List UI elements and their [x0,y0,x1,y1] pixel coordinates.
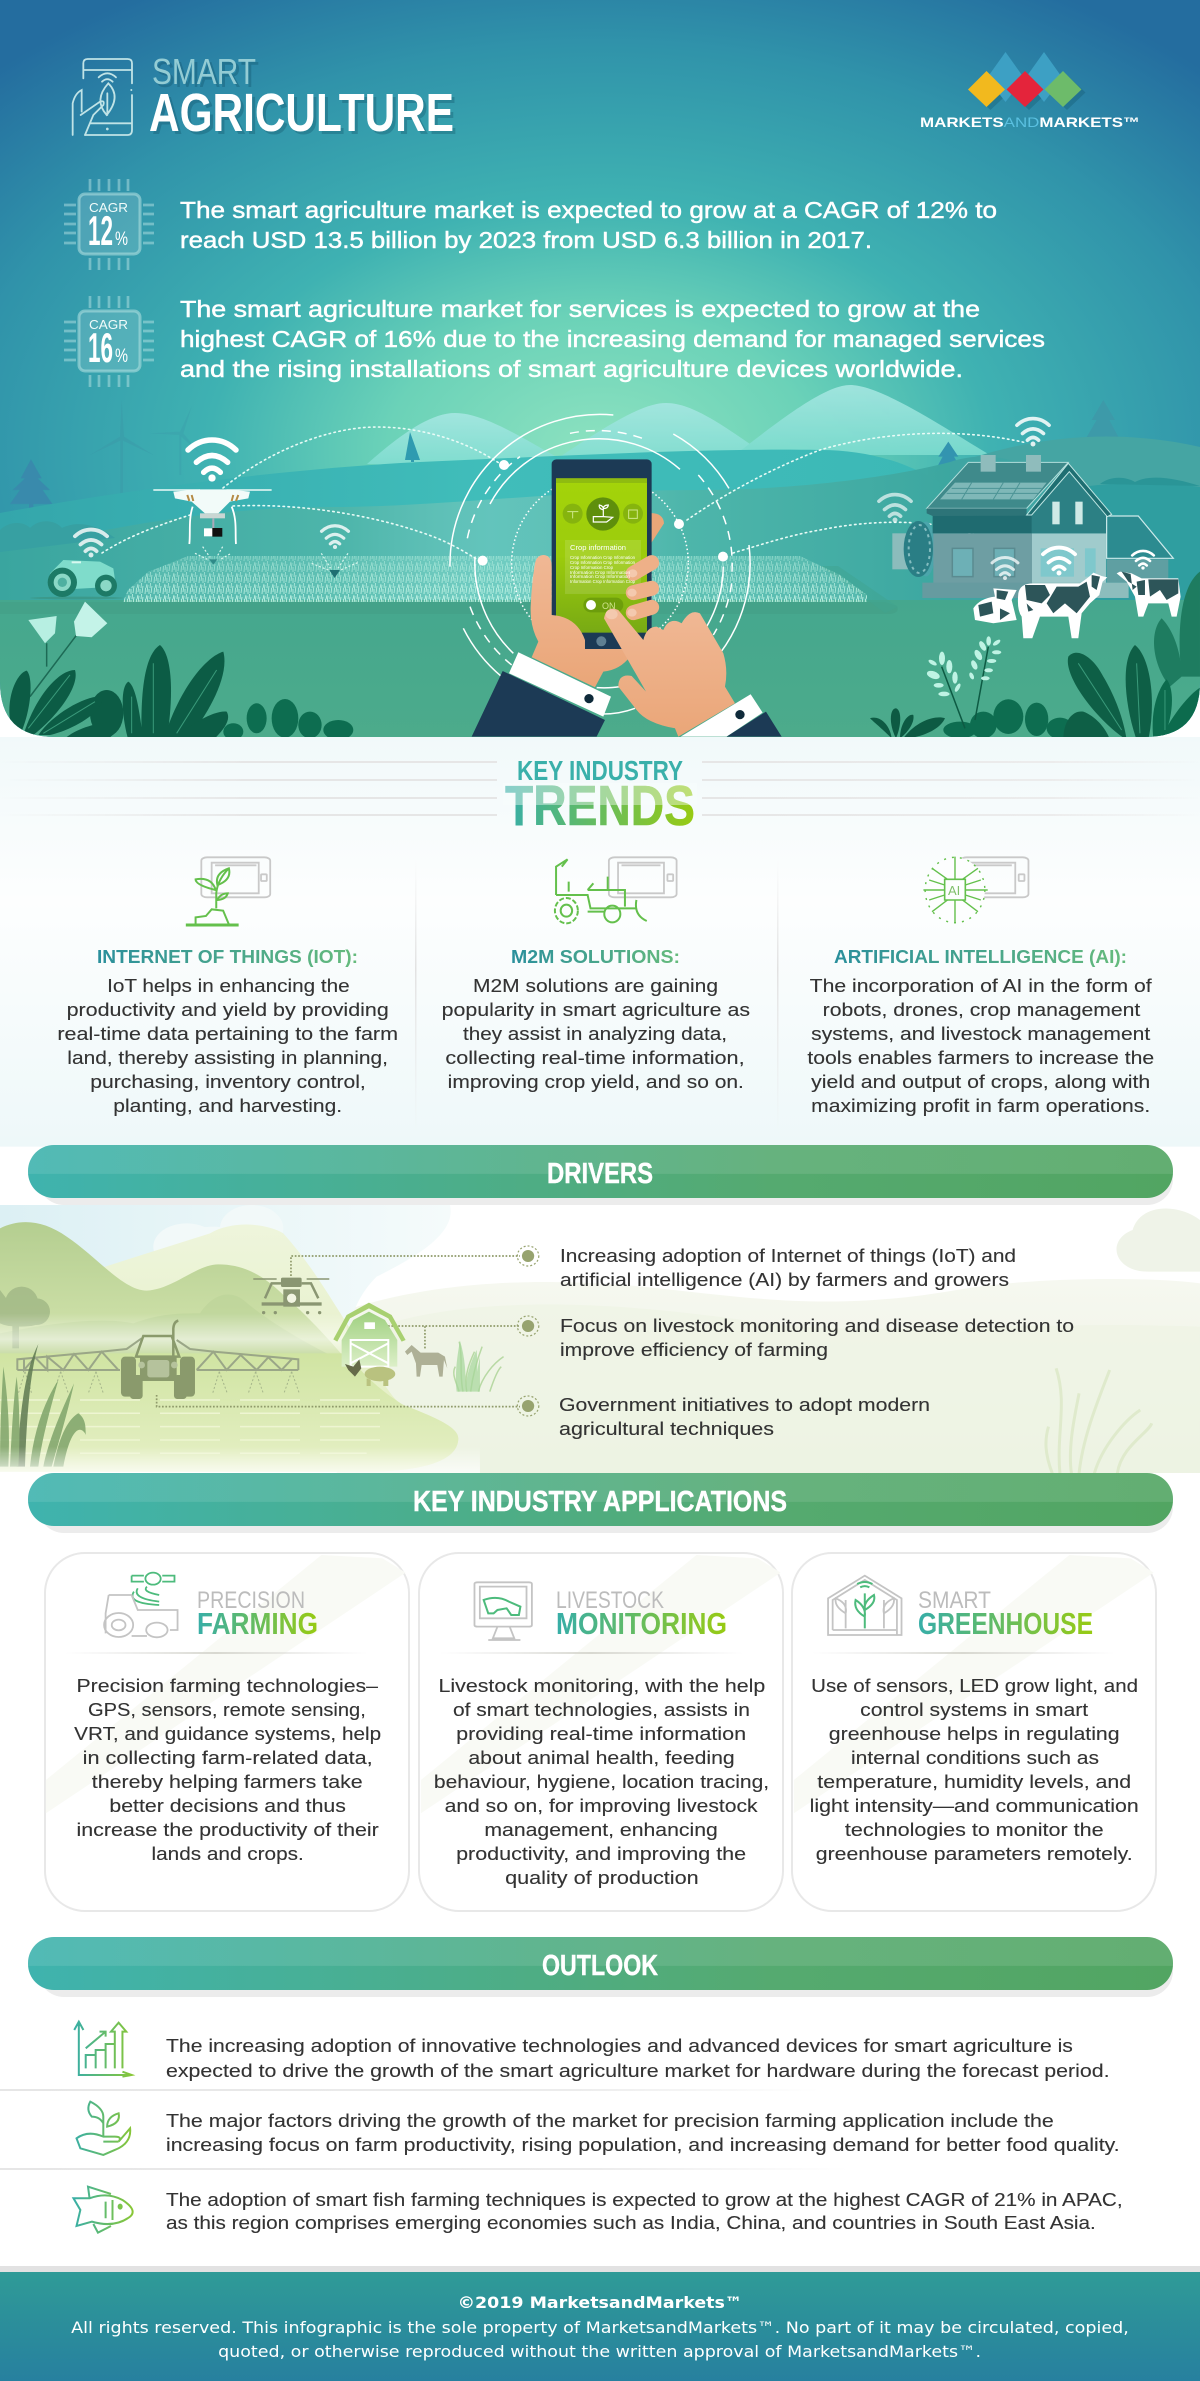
card body: increase the productivity of their [76,1819,379,1840]
card body: behaviour, hygiene, location tracing, [434,1771,769,1792]
right hills [337,1279,1200,1473]
right foliage [870,572,1200,740]
phone screen text: Crop Information Crop Information [570,560,635,565]
trend: internet of things: planting, and harvesting. [113,1095,342,1116]
banner: key industry applications: KEY INDUSTRY APPLICATIONS [413,1486,787,1518]
distant windmills and trees, left [10,435,181,508]
card body: better decisions and thus [109,1795,346,1816]
outlook text: fish farming [166,2189,1123,2233]
icon: monitor with cow [474,1582,532,1640]
icon: growth chart [74,2022,132,2077]
sprayer tractor [17,1321,299,1399]
drivers list: artificial intelligence (AI) by farmers and growers [560,1269,1009,1290]
trend: artificial intelligence: tools enables farmers to increase the [807,1047,1154,1068]
stat text: services CAGR: highest CAGR of 16% due to the increasing demand for managed services [180,326,1045,352]
card body: quality of production [505,1867,699,1888]
card body: light intensity—and communication [810,1795,1139,1816]
trend: artificial intelligence: maximizing profit in farm operations. [811,1095,1150,1116]
rolling hills [0,436,1200,600]
card body: thereby helping farmers take [92,1771,363,1792]
outlook icons [73,2022,133,2233]
icon: CAGR 16% chip: % [115,346,128,367]
card body: and so on, for improving livestock [445,1795,758,1816]
left hand [531,555,630,687]
card body: of smart technologies, assists in [453,1699,750,1720]
icon: CAGR 12% chip [64,179,154,270]
trend: internet of things: land, thereby assisting in planning, [67,1047,388,1068]
icon: CAGR 16% chip [64,296,154,387]
footer: All rights reserved. This infographic is the sole property of MarketsandMarkets™. No part of it may be circulated, copied, [71,2318,1129,2337]
card heading: PRECISION [197,1587,305,1614]
icon: AI chip with tablet [923,857,1028,923]
phone screen text: Information Crop Information [570,574,630,579]
drivers list: agricultural techniques [559,1418,774,1439]
card body: technologies to monitor the [845,1819,1104,1840]
left tree [0,1287,50,1348]
drivers list [559,1245,1074,1439]
trend: M2M solutions: M2M SOLUTIONS: [511,946,680,967]
stat text: market CAGR [180,197,997,253]
trend: artificial intelligence: ARTIFICIAL INTELLIGENCE (AI): [834,946,1127,967]
card body: Precision farming technologies– [76,1675,379,1696]
card body: internal conditions such as [851,1747,1099,1768]
card: precision farming: FARMING [197,1606,318,1641]
phone screen text: Information Crop Information [570,570,630,575]
crop field [0,1353,458,1472]
card body: VRT, and guidance systems, help [74,1723,381,1744]
trend: M2M solutions: collecting real-time information, [445,1047,745,1068]
card body: temperature, humidity levels, and [817,1771,1131,1792]
card body [810,1675,1139,1864]
panel: drivers illustration, left side [0,1205,520,1473]
card heading: LIVESTOCK [556,1587,664,1614]
title icon: tablet with hand and plant [73,59,132,135]
outlook text: precision farming: increasing focus on farm productivity, rising population, and increasing demand for better food quality. [166,2134,1120,2155]
card: smart greenhouse [792,1553,1156,1911]
card body: providing real-time information [456,1723,746,1744]
trend: internet of things: purchasing, inventory control, [90,1071,366,1092]
card body: management, enhancing [484,1819,718,1840]
divider lines between trends [415,860,778,1133]
drivers list: Increasing adoption of Internet of things (IoT) and [560,1245,1016,1266]
drivers list: improve efficiency of farming [560,1339,828,1360]
card: precision farming [45,1553,409,1911]
holding fingers [633,563,652,613]
drivers list: Focus on livestock monitoring and disease detection to [560,1315,1074,1336]
stat text: services CAGR: The smart agriculture market for services is expected to grow at the [180,296,980,322]
heading: key industry trends: TRENDS [505,774,695,838]
icon: CAGR 12% chip: 12 [88,207,113,254]
outlook text: fish farming: The adoption of smart fish farming techniques is expected to grow at the highest CAGR of 21% in APAC, [166,2189,1123,2210]
trend: internet of things: productivity and yield by providing [67,999,389,1020]
card: livestock monitoring: MONITORING [556,1606,727,1641]
trend icons [186,857,1028,925]
sprinklers [195,547,358,578]
outlook text: precision farming [166,2110,1120,2155]
section background below drivers [0,1473,1200,2273]
tractor [30,560,123,599]
phone screen text [570,543,635,611]
right grass [1046,1368,1152,1473]
stat text: services CAGR [180,296,1045,382]
title: AGRICULTURE [149,83,454,143]
banner: drivers: DRIVERS [547,1158,653,1190]
drivers list: Government initiatives to adopt modern [559,1394,930,1415]
hero sky background [0,0,1200,737]
phone screen text: Crop information [570,543,626,552]
trend: artificial intelligence [807,946,1154,1116]
card body: productivity, and improving the [456,1843,746,1864]
crop field [123,556,867,602]
logo: MarketsandMarkets: MARKETS AND MARKETS™ [920,114,1140,130]
phone screen text: Crop Information Crop [570,565,613,570]
phone screen text: Crop Information Crop Information [570,555,635,560]
suit sleeves [472,671,782,737]
right cloud [1117,1209,1200,1272]
icon: CAGR 12% chip: % [115,229,128,250]
pointing hand [604,609,735,737]
left foliage [9,602,353,740]
trend: M2M solutions: improving crop yield, and so on. [448,1071,744,1092]
distant trees, centre and right [938,400,1118,465]
outlook text: hardware: The increasing adoption of innovative technologies and advanced devices for smart agriculture is [166,2035,1073,2056]
trend: internet of things: INTERNET OF THINGS (IOT): [97,946,358,967]
trend: artificial intelligence: The incorporation of AI in the form of [810,975,1153,996]
phone screen text: Information Crop Information Crop [570,579,635,584]
shirt cuffs [509,652,763,737]
grass clump near barn [456,1341,480,1392]
banner: key industry applications [28,1473,1173,1533]
house [892,455,1173,598]
icon: plant with tablet [186,857,270,925]
grass clump [454,1342,504,1392]
card body [434,1675,769,1888]
trend: internet of things [57,946,398,1116]
banner: drivers [28,1145,1173,1205]
trend: artificial intelligence: robots, drones, crop management [823,999,1140,1020]
flowers [28,602,107,697]
logo: MarketsandMarkets [920,52,1140,130]
trend: M2M solutions: they assist in analyzing data, [463,1023,727,1044]
heading: key industry trends [503,755,697,838]
heading decorative lines [0,761,1200,816]
banner: outlook [28,1937,1173,1997]
stat text: services CAGR: and the rising installations of smart agriculture devices worldwide. [180,356,963,382]
card: smart greenhouse: GREENHOUSE [918,1606,1093,1641]
card body: greenhouse parameters remotely. [816,1843,1133,1864]
wifi signal icons [75,419,1154,580]
cows [973,572,1181,638]
sensor rings around phone [450,414,750,714]
footer: ©2019 MarketsandMarkets™ [458,2293,742,2312]
clouds [153,1205,283,1280]
left grass [0,1344,86,1467]
title [150,58,456,134]
card body: Livestock monitoring, with the help [438,1675,765,1696]
card body: in collecting farm-related data, [83,1747,373,1768]
card body: greenhouse helps in regulating [829,1723,1120,1744]
title: SMART [152,51,256,92]
footer [0,2266,1200,2381]
icon: fish [73,2187,133,2233]
trend: M2M solutions: popularity in smart agriculture as [442,999,750,1020]
drone [153,489,272,544]
card body: about animal health, feeding [468,1747,735,1768]
heading: key industry trends: KEY INDUSTRY [517,755,683,786]
trend: artificial intelligence: systems, and livestock management [811,1023,1150,1044]
card body: GPS, sensors, remote sensing, [88,1699,366,1720]
connector lines [157,1256,520,1407]
trend: internet of things: real-time data pertaining to the farm [57,1023,398,1044]
trend: internet of things: IoT helps in enhancing the [107,975,350,996]
phone in hand [472,459,782,737]
icon: CAGR 16% chip: CAGR [89,317,128,332]
trend: M2M solutions [442,946,750,1092]
card: livestock monitoring [419,1553,783,1911]
phone screen [556,478,647,633]
card body: Use of sensors, LED grow light, and [811,1675,1138,1696]
card body: lands and crops. [152,1843,304,1864]
icon: CAGR 16% chip: 16 [88,324,113,371]
back finger [652,513,664,542]
icon: CAGR 12% chip: CAGR [89,200,128,215]
icon: greenhouse [828,1576,902,1635]
trend: artificial intelligence: yield and output of crops, along with [811,1071,1150,1092]
mist [0,1313,347,1357]
stat text: market CAGR: reach USD 13.5 billion by 2023 from USD 6.3 billion in 2017. [180,227,872,253]
icon: hand with seedling [77,2102,130,2155]
card body: control systems in smart [860,1699,1088,1720]
phone body [552,459,652,649]
icon: tractor with tablet [555,857,677,923]
light hill [0,1225,458,1472]
footer: quoted, or otherwise reproduced without the written approval of MarketsandMarkets™. [218,2342,981,2361]
outlook text: hardware [166,2035,1110,2081]
banner: outlook: OUTLOOK [542,1950,658,1982]
panel: drivers illustration, right side [0,1147,1200,1473]
ground [0,600,1200,737]
barn [333,1303,406,1367]
page background: trends section [0,737,1200,1147]
AI label in chip: AI [948,883,960,898]
card body [74,1675,381,1864]
dotted network arcs [102,427,1035,560]
card heading: SMART [918,1587,991,1614]
sky patch [0,1205,451,1333]
distant mountains [367,385,990,472]
connector dots [517,1246,539,1416]
main mountains [0,1222,347,1472]
outlook text: precision farming: The major factors driving the growth of the market for precision farming application include the [166,2110,1054,2131]
stat text: market CAGR: The smart agriculture market is expected to grow at a CAGR of 12% to [180,197,997,223]
farm animals [345,1345,447,1386]
trend: M2M solutions: M2M solutions are gaining [473,975,718,996]
outlook text: fish farming: as this region comprises emerging economies such as India, China, and countries in South East Asia. [166,2212,1096,2233]
panel: hero header [0,0,1200,740]
icon: tractor with satellite [104,1573,178,1637]
drone [253,1278,329,1314]
outlook text: hardware: expected to drive the growth of the smart agriculture market for hardware during the forecast period. [166,2060,1110,2081]
phone screen text: ON [602,601,616,611]
white sprigs [926,636,1001,728]
